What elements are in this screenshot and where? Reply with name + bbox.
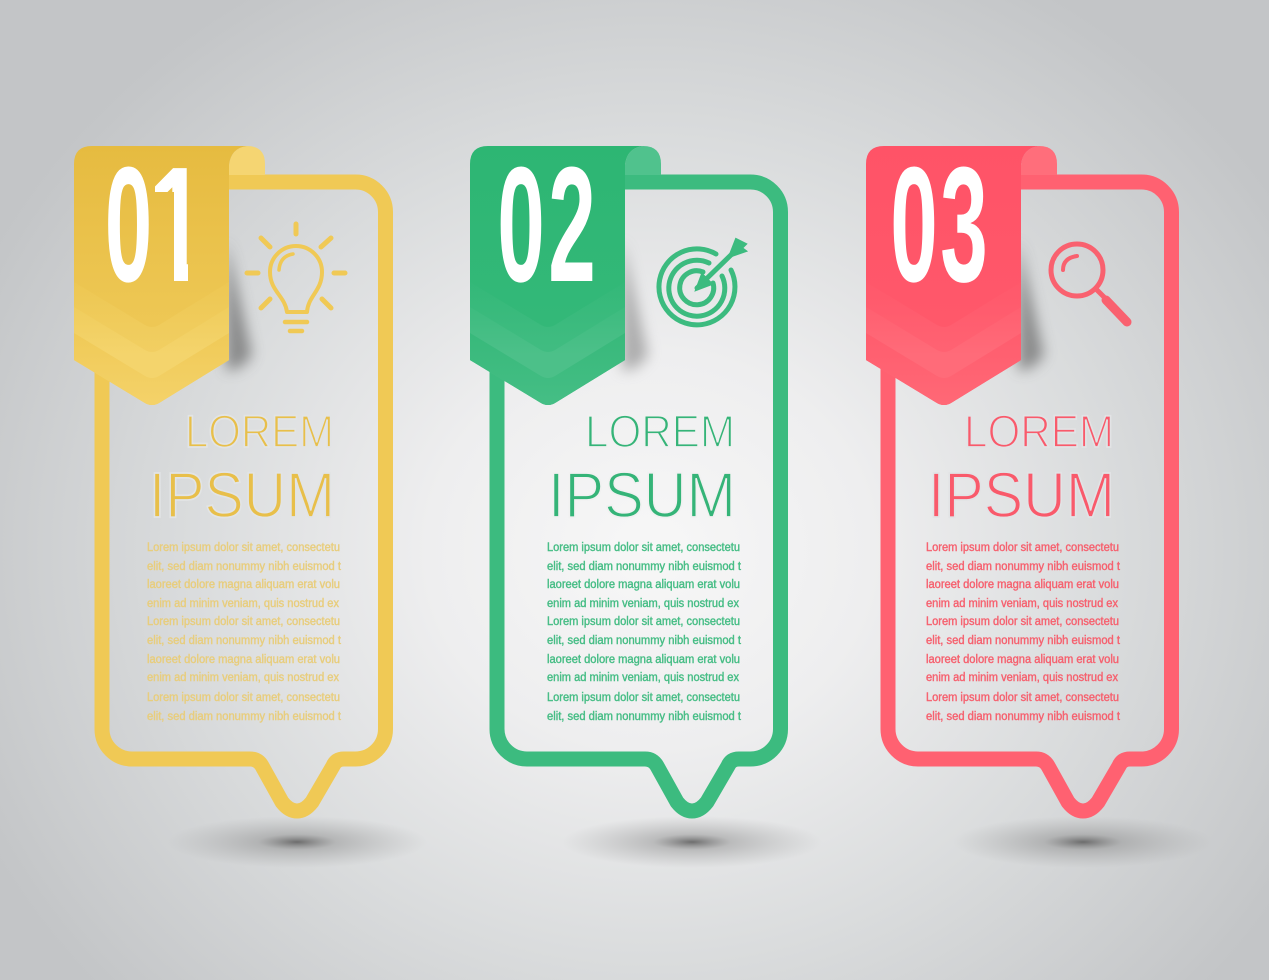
- heading: LOREM IPSUM: LOREM: [585, 406, 735, 457]
- number 03: [890, 133, 988, 316]
- ground shadow 2: [562, 816, 822, 868]
- body text: laoreet dolore magna aliquam erat volu: [147, 654, 340, 666]
- body text: Lorem ipsum dolor sit amet, consectetu: [147, 542, 340, 554]
- body text: elit, sed diam nonummy nibh euismod t: [926, 711, 1121, 723]
- heading: LOREM IPSUM: IPSUM: [548, 459, 736, 531]
- speech-bubble frame 2: [497, 182, 780, 811]
- panel: card 3: [866, 133, 1213, 868]
- body text: elit, sed diam nonummy nibh euismod t: [547, 561, 742, 573]
- icon: target with arrow: [659, 239, 746, 325]
- body text: elit, sed diam nonummy nibh euismod t: [547, 635, 742, 647]
- heading: LOREM IPSUM: IPSUM: [928, 459, 1115, 531]
- speech-bubble frame 3: [888, 182, 1172, 811]
- body text: elit, sed diam nonummy nibh euismod t: [926, 561, 1121, 573]
- body text: Lorem ipsum dolor sit amet, consectetu: [547, 542, 740, 554]
- number 03: 3: [940, 133, 988, 316]
- body text: elit, sed diam nonummy nibh euismod t: [547, 711, 742, 723]
- ground shadow 1: [167, 816, 427, 868]
- body text: Lorem ipsum dolor sit amet, consectetu: [147, 616, 340, 628]
- body text: elit, sed diam nonummy nibh euismod t: [147, 561, 342, 573]
- ribbon 1: [74, 146, 265, 405]
- body text: enim ad minim veniam, quis nostrud ex: [547, 672, 739, 684]
- number 03: 0: [890, 133, 938, 316]
- heading: LOREM IPSUM: IPSUM: [149, 459, 335, 531]
- ribbon 2: [470, 146, 661, 405]
- body text: laoreet dolore magna aliquam erat volu: [547, 654, 740, 666]
- number 01: 0: [105, 133, 152, 316]
- ground shadow 3: [953, 816, 1213, 868]
- number 02: 2: [548, 133, 596, 316]
- heading: LOREM IPSUM: [548, 406, 736, 531]
- body text: enim ad minim veniam, quis nostrud ex: [926, 598, 1118, 610]
- body text: [547, 542, 742, 723]
- body text: [926, 542, 1121, 723]
- body text: laoreet dolore magna aliquam erat volu: [547, 579, 740, 591]
- number 02: 0: [497, 133, 545, 316]
- body text: Lorem ipsum dolor sit amet, consectetu: [926, 616, 1119, 628]
- icon: light bulb: [247, 224, 345, 331]
- body text: enim ad minim veniam, quis nostrud ex: [147, 672, 339, 684]
- body text: Lorem ipsum dolor sit amet, consectetu: [926, 542, 1119, 554]
- body text: enim ad minim veniam, quis nostrud ex: [547, 598, 739, 610]
- body text: Lorem ipsum dolor sit amet, consectetu: [926, 692, 1119, 704]
- body text: enim ad minim veniam, quis nostrud ex: [147, 598, 339, 610]
- body text: Lorem ipsum dolor sit amet, consectetu: [147, 692, 340, 704]
- body text: laoreet dolore magna aliquam erat volu: [926, 654, 1119, 666]
- body text: Lorem ipsum dolor sit amet, consectetu: [547, 616, 740, 628]
- body text: enim ad minim veniam, quis nostrud ex: [926, 672, 1118, 684]
- heading: LOREM IPSUM: LOREM: [964, 406, 1114, 457]
- body text: elit, sed diam nonummy nibh euismod t: [926, 635, 1121, 647]
- speech-bubble frame 1: [102, 182, 386, 811]
- number 01: [108, 166, 188, 283]
- number 01: 1: [148, 133, 206, 317]
- heading: LOREM IPSUM: [928, 406, 1115, 531]
- number 02: [497, 133, 596, 316]
- icon: magnifying glass: [1051, 244, 1127, 322]
- heading: LOREM IPSUM: [149, 406, 335, 531]
- body text: laoreet dolore magna aliquam erat volu: [926, 579, 1119, 591]
- ribbon 3: [866, 146, 1057, 405]
- panel: card 2: [470, 133, 822, 868]
- heading: LOREM IPSUM: LOREM: [185, 406, 334, 457]
- body text: [147, 542, 342, 723]
- body text: elit, sed diam nonummy nibh euismod t: [147, 711, 342, 723]
- body text: elit, sed diam nonummy nibh euismod t: [147, 635, 342, 647]
- body text: Lorem ipsum dolor sit amet, consectetu: [547, 692, 740, 704]
- body text: laoreet dolore magna aliquam erat volu: [147, 579, 340, 591]
- panel: card 1: [74, 133, 427, 868]
